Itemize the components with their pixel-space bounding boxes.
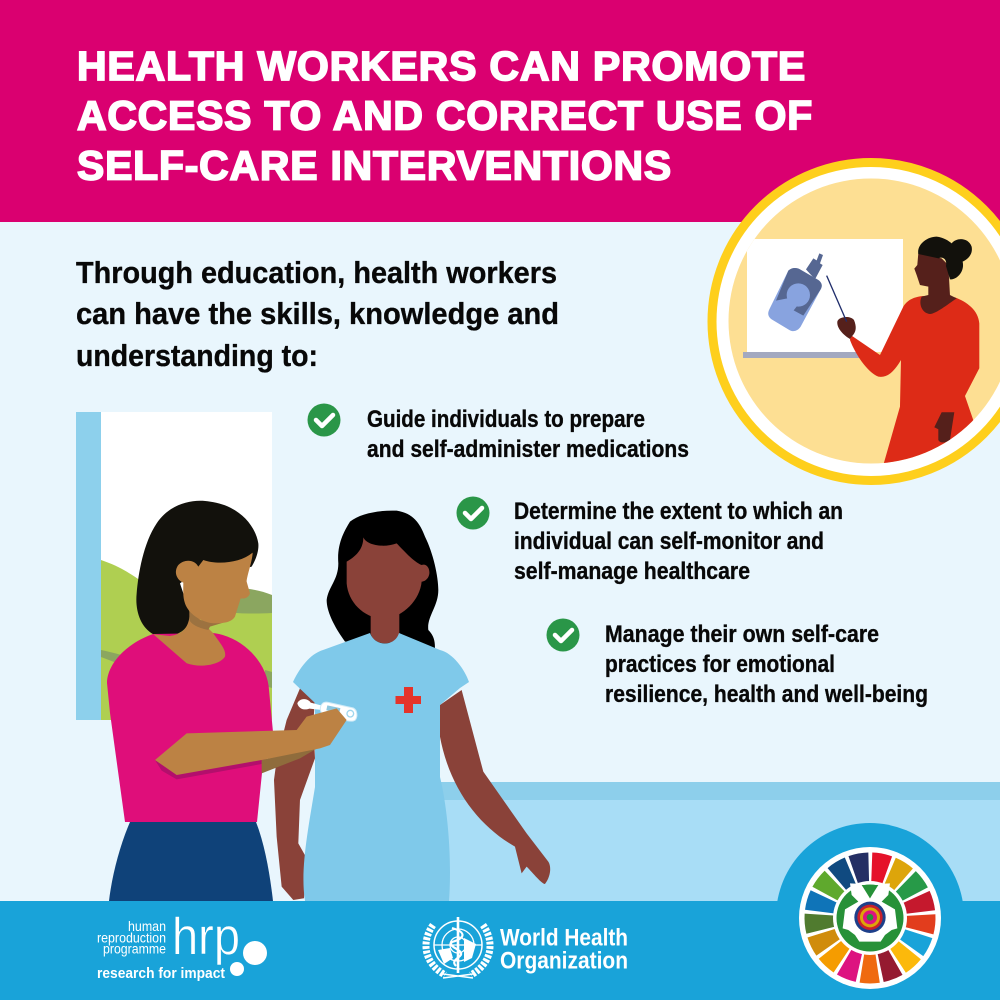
HRP logo: reproduction bbox=[97, 930, 166, 946]
circular illustration: teacher at whiteboard bbox=[712, 162, 1000, 480]
nurse hair bbox=[327, 511, 438, 650]
nurse dress bbox=[293, 633, 469, 901]
checklist item 2: self-manage healthcare bbox=[514, 558, 750, 585]
HRP logo: human bbox=[128, 919, 166, 934]
title: SELF-CARE INTERVENTIONS bbox=[77, 142, 672, 188]
HRP logo: programme bbox=[103, 942, 166, 956]
checklist item 1: and self-administer medications bbox=[367, 436, 689, 463]
title: ACCESS TO AND CORRECT USE OF bbox=[77, 92, 813, 138]
teacher hands bbox=[837, 317, 856, 339]
teacher body bbox=[850, 296, 979, 465]
title bbox=[77, 43, 813, 188]
health worker illustration bbox=[107, 501, 357, 901]
worker neck shadow bbox=[189, 608, 223, 630]
intro text: can have the skills, knowledge and bbox=[76, 296, 559, 331]
checklist item 2 bbox=[456, 496, 843, 585]
intro text: understanding to: bbox=[76, 338, 318, 373]
nurse illustration bbox=[274, 511, 550, 901]
worker face bbox=[176, 553, 253, 623]
pointer stick bbox=[827, 276, 847, 322]
checklist item 3: resilience, health and well-being bbox=[605, 681, 928, 708]
icon: check bbox=[308, 404, 340, 436]
nurse neck bbox=[371, 613, 399, 643]
self-test device and swab bbox=[297, 699, 357, 721]
teacher neck and face bbox=[914, 253, 957, 314]
floor bbox=[440, 800, 1000, 902]
WHO logo bbox=[426, 917, 628, 978]
worker shirt bbox=[107, 633, 273, 822]
worker hair bbox=[136, 501, 258, 636]
checklist item 2: individual can self-monitor and bbox=[514, 528, 824, 555]
WHO emblem bbox=[426, 917, 490, 978]
floor band bbox=[440, 782, 1000, 800]
icon: check bbox=[456, 496, 490, 530]
worker arm bbox=[155, 708, 347, 779]
nurse arms bbox=[274, 688, 550, 900]
header banner bbox=[0, 0, 1000, 222]
checklist item 3: Manage their own self-care bbox=[605, 621, 879, 648]
worker neck bbox=[153, 608, 225, 666]
title: HEALTH WORKERS CAN PROMOTE bbox=[77, 43, 806, 89]
WHO logo: Organization bbox=[500, 948, 628, 974]
footer band bbox=[0, 823, 1000, 1000]
HRP logo: research for impact bbox=[97, 965, 225, 982]
checklist item 3: practices for emotional bbox=[605, 651, 835, 678]
worker skirt bbox=[109, 822, 273, 901]
HRP logo: hrp bbox=[172, 908, 240, 966]
checklist item 1 bbox=[308, 404, 689, 463]
checklist item 3 bbox=[546, 618, 928, 708]
intro text bbox=[76, 255, 559, 373]
HRP logo bbox=[97, 908, 267, 982]
icon: red cross bbox=[396, 687, 421, 713]
checklist item 1: Guide individuals to prepare bbox=[367, 406, 645, 433]
teacher hair bbox=[918, 237, 972, 279]
icon: medicine bottle on whiteboard bbox=[768, 253, 823, 331]
SDG wheel bbox=[798, 846, 942, 990]
checklist item 2: Determine the extent to which an bbox=[514, 498, 843, 525]
emblem: hands around target bbox=[843, 883, 897, 942]
intro text: Through education, health workers bbox=[76, 255, 557, 290]
icon: check bbox=[546, 618, 580, 652]
nurse face bbox=[347, 537, 429, 619]
window with hills bbox=[76, 412, 272, 720]
WHO logo: World Health bbox=[500, 924, 628, 952]
